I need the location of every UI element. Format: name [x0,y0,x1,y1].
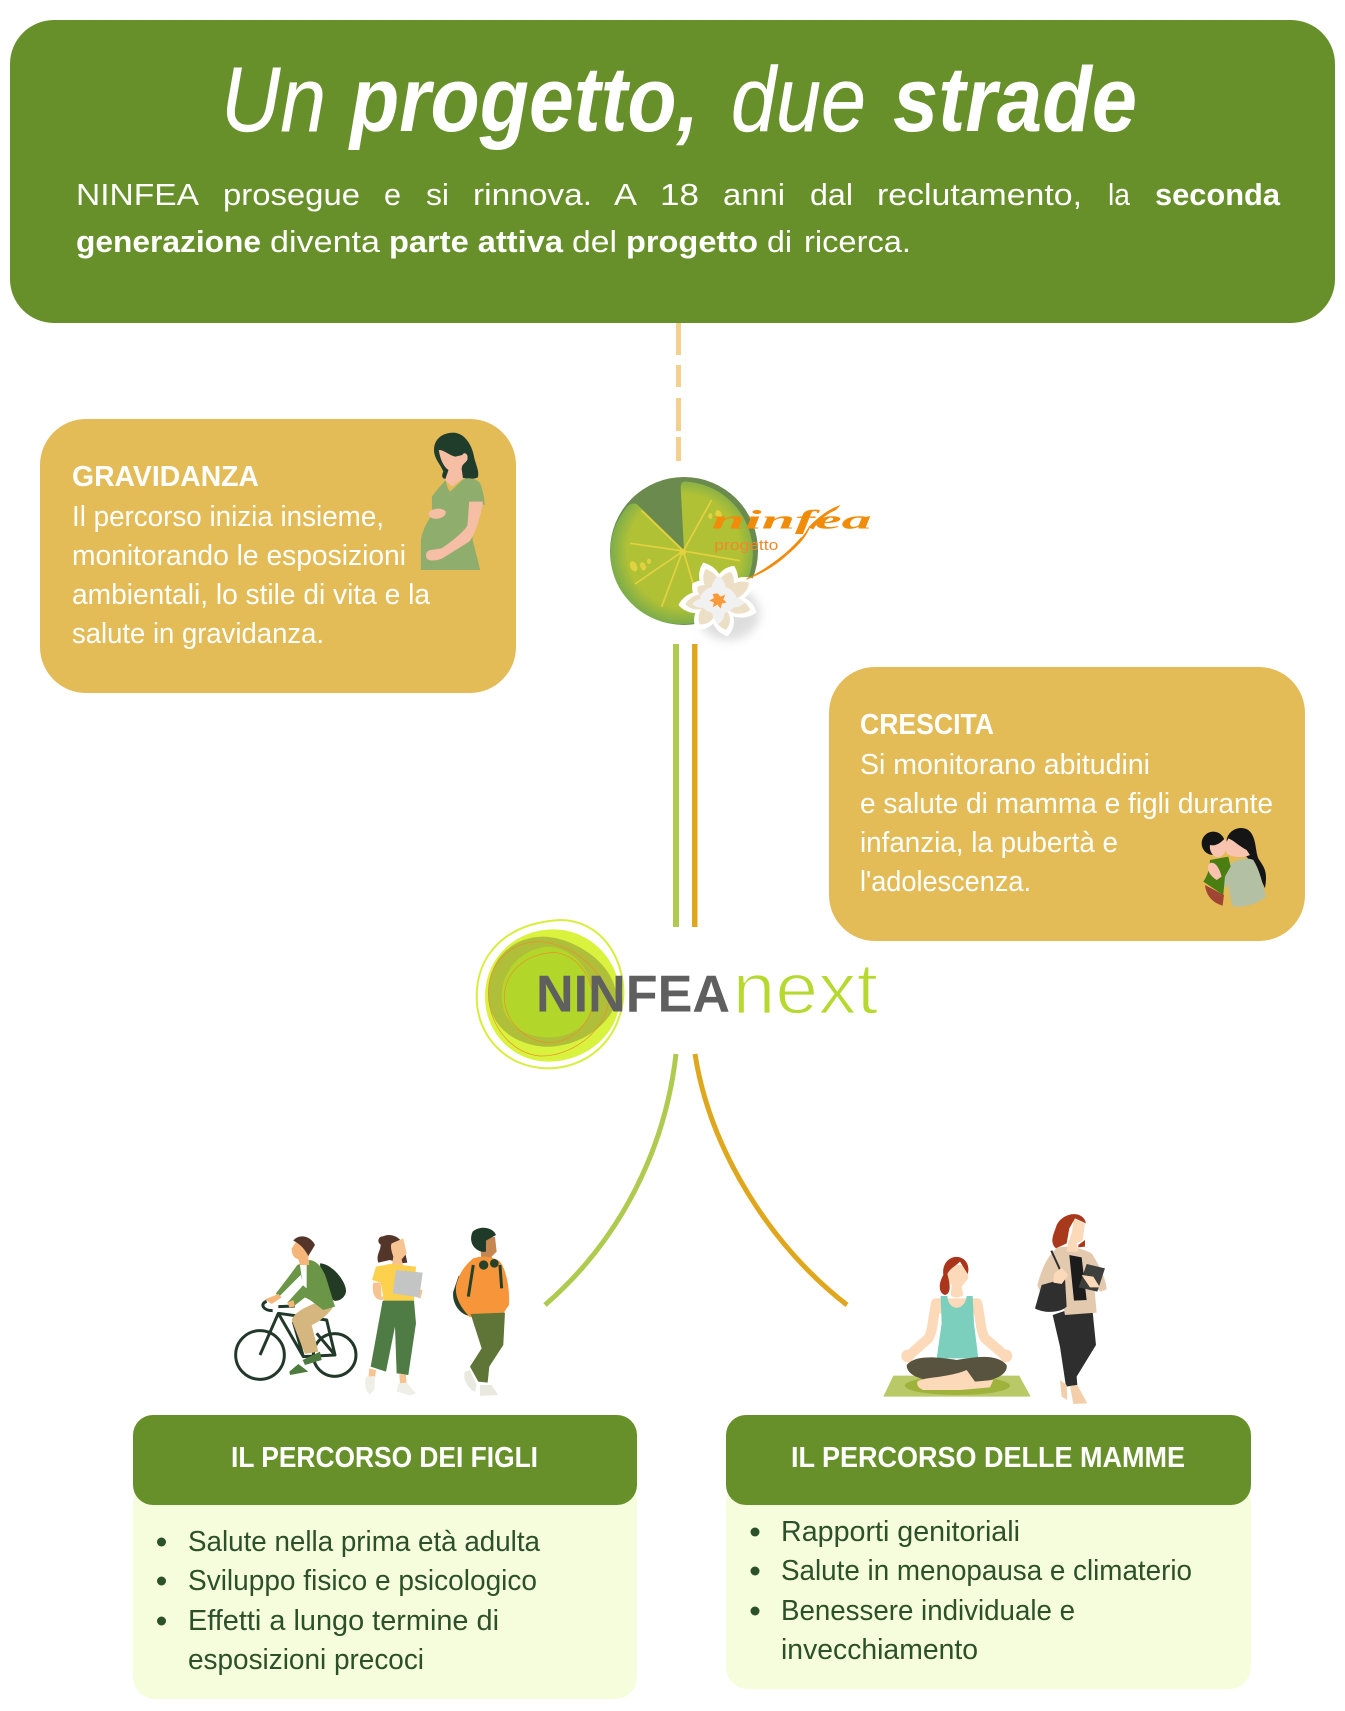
title [221,49,1137,151]
logo wordmark: ninfea [712,506,872,535]
connector lines: vertical [673,644,698,927]
wordmark: NINFEA [536,966,730,1024]
intro text: 18 [660,177,699,212]
panel: crescita [829,667,1305,941]
intro text: prosegue [223,177,360,212]
logo wordmark [712,505,872,579]
wordmark [536,948,878,1029]
heading: figli: IL PERCORSO DEI FIGLI [231,1442,538,1474]
flower [679,561,759,637]
icon: mother hugging child [1202,828,1266,907]
gravidanza text [72,461,431,650]
intro text: la [1108,177,1131,212]
intro text: generazione [76,224,261,259]
crescita text: l'adolescenza. [860,866,1031,898]
intro text [76,177,1281,259]
crescita text: e salute di mamma e figli durante [860,788,1273,820]
list: mamme: invecchiamento [781,1634,978,1666]
panel: gravidanza [40,419,516,693]
intro text: reclutamento, [877,177,1082,212]
wordmark: next [733,948,878,1029]
intro text: rinnova. [473,177,592,212]
title: Un [221,49,326,151]
illustration: mothers [883,1214,1107,1404]
intro text: di [767,224,792,259]
intro text: NINFEA [76,177,199,212]
list: mamme: Rapporti genitoriali [781,1516,1020,1548]
list: figli: Effetti a lungo termine di [188,1605,499,1637]
list: mamme [750,1516,1192,1666]
crescita text: infanzia, la pubertà e [860,827,1118,859]
student with tablet [365,1235,423,1395]
title: due [731,49,866,151]
intro text: diventa [270,224,381,259]
logo: ninfea next [477,920,878,1068]
cyclist [236,1236,356,1379]
header panel [10,20,1335,323]
intro text: ricerca. [804,224,911,259]
list: figli: Salute nella prima età adulta [188,1526,541,1558]
intro text: seconda [1155,177,1281,212]
student with hoodie [453,1228,509,1396]
intro text: si [426,177,449,212]
list: mamme: Benessere individuale e [781,1595,1075,1627]
illustration: young people [236,1228,509,1396]
intro text: anni [723,177,785,212]
crescita text: Si monitorano abitudini [860,749,1150,781]
heading: mamme: IL PERCORSO DELLE MAMME [791,1442,1185,1474]
list: figli [157,1526,541,1676]
woman meditating [883,1257,1031,1397]
intro text: dal [810,177,853,212]
gravidanza text: salute in gravidanza. [72,618,324,650]
crescita text: CRESCITA [860,709,994,741]
logo wordmark: progetto [714,538,778,554]
gravidanza text: ambientali, lo stile di vita e la [72,579,431,611]
intro text: progetto [626,224,758,259]
title: progetto, [347,49,699,151]
intro text: parte attiva [389,224,564,259]
list: figli: Sviluppo fisico e psicologico [188,1565,537,1597]
crescita text [860,709,1273,898]
title: strade [893,49,1137,151]
list: mamme: Salute in menopausa e climaterio [781,1555,1192,1587]
list: figli: esposizioni precoci [188,1644,424,1676]
logo: progetto ninfea [610,477,872,640]
gravidanza text: Il percorso inizia insieme, [72,501,384,533]
panel: il percorso dei figli [133,1415,637,1699]
dashed connector line [676,323,681,461]
woman with bag [1035,1214,1107,1404]
icon: pregnant woman [421,433,485,570]
panel: il percorso delle mamme [726,1415,1251,1689]
connector curves [545,1054,847,1305]
intro text: e [384,177,401,212]
intro text: A [614,177,637,212]
intro text: del [572,224,617,259]
gravidanza text: monitorando le esposizioni [72,540,406,572]
gravidanza text: GRAVIDANZA [72,461,259,493]
